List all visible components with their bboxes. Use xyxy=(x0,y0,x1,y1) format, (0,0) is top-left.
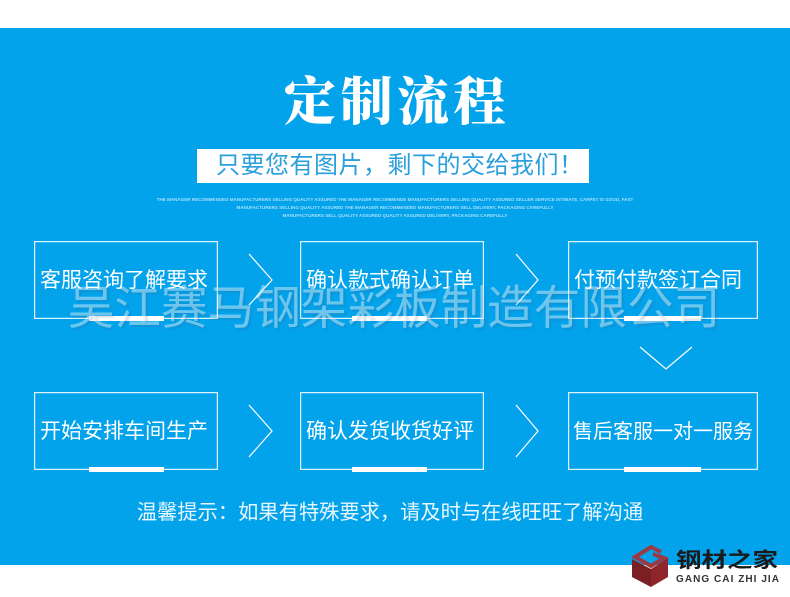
arrow: step 4 to 5 xyxy=(249,405,272,457)
step 3 box: 付预付款签订合同 xyxy=(574,269,742,292)
logo chinese name: 钢材之家 xyxy=(676,549,778,572)
arrow: step 3 to 6 xyxy=(640,347,692,369)
logo pinyin: GANG CAI ZHI JIA xyxy=(676,574,780,585)
step 6 box xyxy=(568,392,758,470)
step 1 box xyxy=(34,241,218,319)
english description text xyxy=(156,197,634,218)
step 1 box: 客服咨询了解要求 xyxy=(40,269,208,292)
step 1 bar xyxy=(89,316,164,321)
title: 定制流程 xyxy=(284,75,510,132)
arrow: step 2 to 3 xyxy=(516,254,538,305)
arrow: step 5 to 6 xyxy=(516,405,538,457)
step 3 box xyxy=(568,241,758,319)
step 2 box: 确认款式确认订单 xyxy=(306,269,474,292)
step 6 box: 售后客服一对一服务 xyxy=(573,421,753,443)
step 5 bar xyxy=(352,467,427,472)
step 6 bar xyxy=(624,467,701,472)
subtitle banner: 只要您有图片，剩下的交给我们！ xyxy=(216,152,584,179)
step 4 box xyxy=(34,392,218,470)
step 4 bar xyxy=(89,467,164,472)
step 5 box: 确认发货收货好评 xyxy=(306,420,474,443)
english description text: THE MANAGER RECOMMENDED MANUFACTURERS SELLING QUALITY ASSURED THE MANAGER RECOMMENDE MANUFACTURERS SELLING QUALITY ASSURED SELLER SERVICE INTIMATE, CARPET IS GOOD, FAST xyxy=(157,197,633,202)
step 2 bar xyxy=(352,316,427,321)
step 4 box: 开始安排车间生产 xyxy=(40,420,208,443)
icon: cube xyxy=(631,544,668,587)
reminder note: 温馨提示：如果有特殊要求，请及时与在线旺旺了解沟通 xyxy=(137,502,643,524)
english description text: MANUFACTURERS SELL QUALITY ASSURED QUALITY ASSURED DELIVERY, PACKAGING CAREFULLY xyxy=(283,213,507,218)
step 3 bar xyxy=(624,316,701,321)
watermark: 吴江赛马钢架彩板制造有限公司 xyxy=(68,282,720,334)
step 5 box xyxy=(300,392,484,470)
step 2 box xyxy=(300,241,484,319)
english description text: MANUFACTURERS SELLING QUALITY ASSURED THE MANAGER RECOMMENDED MANUFACTURERS SELL DELIVERY, PACKAGING CAREFULLY xyxy=(236,205,554,210)
logo xyxy=(631,544,780,587)
arrow: step 1 to 2 xyxy=(249,254,272,305)
